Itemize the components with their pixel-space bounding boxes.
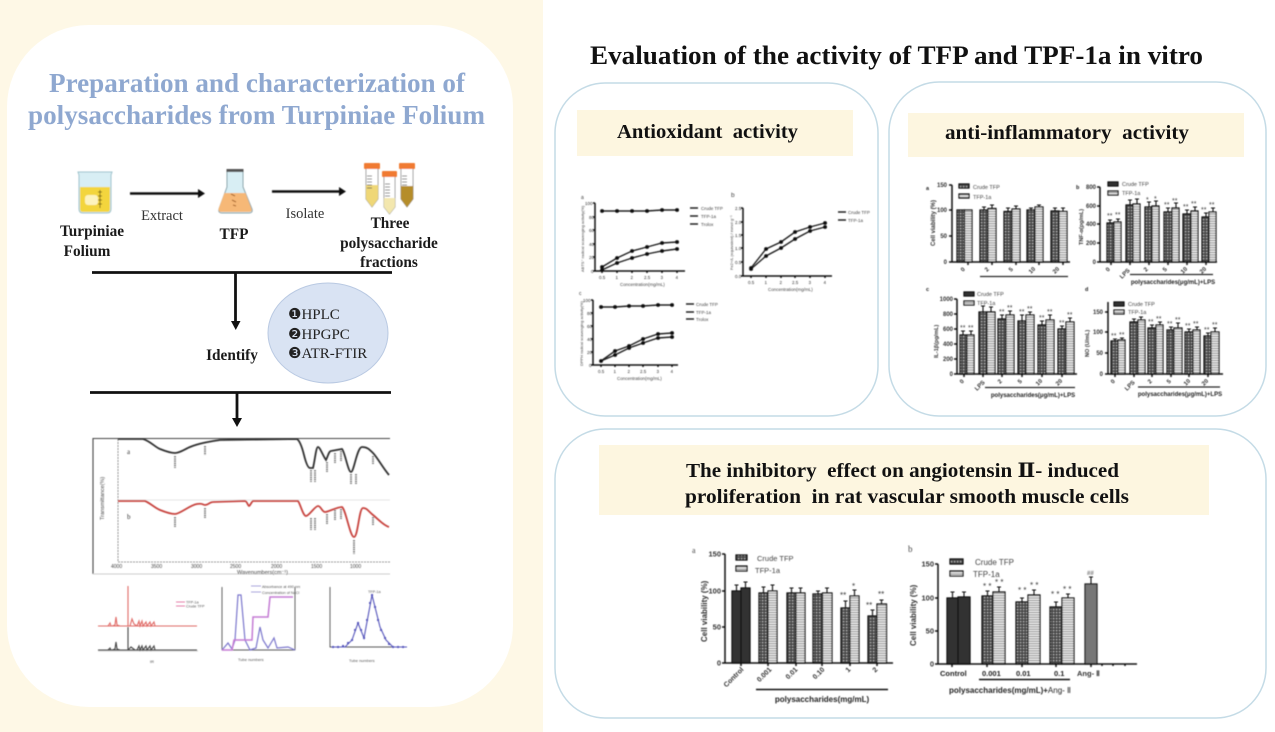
- chart: FTIR spectra: b: [127, 513, 131, 521]
- callout: methods ellipse: ❸ATR-FTIR: [288, 346, 367, 362]
- chart: ABTS radical scavenging: Concentration(mg/mL): [620, 282, 665, 287]
- chart: a VSMC cell viability: 0.001: [756, 666, 773, 684]
- chart: FRAP reducing power: 2.0: [735, 220, 742, 225]
- chart: DPPH radical scavenging: 20: [587, 350, 593, 355]
- panel: anti-inflammatory activity: [889, 82, 1266, 416]
- chart: ABTS radical scavenging: 0: [591, 269, 594, 274]
- chart: ABTS radical scavenging: TFP-1a: [701, 214, 717, 219]
- chart: ABTS radical scavenging: Trolox: [701, 222, 714, 227]
- chart: ABTS radical scavenging: 4: [676, 275, 678, 280]
- chart: c IL-1 beta: 5: [1017, 378, 1024, 385]
- chart: d NO: 5: [1166, 378, 1173, 385]
- chart: b VSMC cell viability with Ang II: b: [908, 544, 913, 554]
- chart: b TNF-alpha: 10: [1180, 266, 1190, 275]
- chart: c IL-1 beta: 10: [1035, 378, 1045, 387]
- chart: b VSMC cell viability with Ang II: 0.1: [1054, 669, 1064, 678]
- chart: b VSMC cell viability with Ang II: 100: [921, 594, 934, 602]
- chart: FRAP reducing power: Fe2+/L (equivalent) / mmol·g⁻¹: [729, 215, 734, 270]
- chart: b TNF-alpha: TFP-1a: [1122, 191, 1141, 197]
- chart: HPLC chromatograms: tR: [150, 659, 154, 664]
- chart: DPPH radical scavenging: 4: [670, 369, 674, 374]
- label: three polysaccharide fractions: polysaccharide: [340, 235, 438, 252]
- chart: FTIR spectra: 3000: [191, 564, 202, 570]
- chart: ABTS radical scavenging: 3: [660, 275, 664, 280]
- chart: b VSMC cell viability with Ang II: [908, 544, 1137, 695]
- title: evaluation of activity: Evaluation of the activity of TFP and TPF-1a in vitro: [590, 41, 1203, 70]
- chart: FRAP reducing power: TFP-1a: [848, 218, 864, 223]
- chart: c IL-1 beta: TFP-1a: [977, 301, 996, 307]
- chart: c IL-1 beta: 600: [943, 327, 954, 333]
- chart: b TNF-alpha: [1076, 182, 1217, 286]
- chart: b VSMC cell viability with Ang II: 0.01: [1016, 669, 1031, 678]
- chart: a VSMC cell viability: 1: [845, 666, 852, 674]
- chart: b VSMC cell viability with Ang II: * *: [1063, 585, 1071, 594]
- label: three polysaccharide fractions: [340, 215, 438, 271]
- chart: c IL-1 beta: 0: [959, 378, 966, 385]
- chart: b TNF-alpha: 800: [1086, 185, 1097, 191]
- chart: b VSMC cell viability with Ang II: 0.001: [982, 669, 1001, 678]
- callout: methods ellipse: ❷HPGPC: [288, 327, 350, 343]
- chart: ABTS radical scavenging: 60: [589, 228, 595, 233]
- title: preparation and characterization: [28, 68, 486, 130]
- chart: c IL-1 beta: **: [1039, 315, 1045, 322]
- chart: a VSMC cell viability: **: [866, 601, 872, 610]
- chart: b VSMC cell viability with Ang II: ##: [1087, 571, 1094, 577]
- heading: antioxidant activity: [577, 110, 853, 156]
- chart: DPPH radical scavenging: 1: [614, 369, 616, 374]
- chart: a VSMC cell viability: 2: [872, 666, 879, 674]
- chart: molecular weight peak: Tube numbers: [349, 658, 375, 663]
- chart: a VSMC cell viability: 0.10: [812, 666, 826, 681]
- chart: DPPH radical scavenging: 40: [587, 337, 593, 342]
- chart: b TNF-alpha: **: [1164, 202, 1170, 209]
- chart: b TNF-alpha: b: [1076, 185, 1080, 191]
- chart: a VSMC cell viability: Control: [723, 666, 745, 689]
- chart: a cell viability: Cell viability (%): [931, 200, 937, 246]
- chart: HPLC chromatograms: TFP-1a: [186, 600, 200, 604]
- chart: FRAP reducing power: 1.0: [735, 246, 742, 251]
- chart: FTIR spectra: 2500: [230, 564, 241, 570]
- chart: d NO: 20: [1201, 378, 1211, 387]
- chart: a VSMC cell viability: TFP-1a: [755, 566, 781, 575]
- chart: b VSMC cell viability with Ang II: Cell viability (%): [909, 584, 918, 646]
- chart: a VSMC cell viability: 50: [713, 622, 721, 632]
- chart: a VSMC cell viability: 0: [717, 658, 721, 668]
- chart: a cell viability: 20: [1052, 266, 1062, 275]
- chart: DPPH radical scavenging: Trolox: [696, 317, 709, 322]
- chart: DPPH radical scavenging: 3: [656, 369, 660, 374]
- chart: d NO: **: [1156, 316, 1162, 323]
- heading: anti-inflammatory activity: anti-inflammatory activity: [945, 122, 1189, 144]
- chart: FRAP reducing power: 0.5: [748, 280, 755, 285]
- chart: a cell viability: TFP-1a: [973, 195, 992, 201]
- chart: a VSMC cell viability: 0.01: [785, 666, 799, 681]
- chart: a VSMC cell viability: 100: [708, 586, 721, 596]
- chart: DPPH radical scavenging: 2.5: [640, 369, 647, 374]
- chart: b TNF-alpha: 2: [1143, 266, 1150, 273]
- arrow: extract: [130, 189, 205, 198]
- title: preparation and characterization: polysaccharides from Turpiniae Folium: [28, 100, 486, 130]
- chart: c IL-1 beta: [926, 287, 1077, 399]
- chart: d NO: **: [1148, 319, 1154, 326]
- chart: DPPH radical scavenging: c: [579, 291, 582, 297]
- chart: FTIR spectra: 4000: [111, 564, 122, 570]
- chart: b TNF-alpha: **: [1191, 201, 1197, 208]
- chart: b TNF-alpha: Crude TFP: [1122, 182, 1149, 188]
- chart: a VSMC cell viability: Cell viability (%): [700, 580, 709, 642]
- chart: c IL-1 beta: **: [1067, 312, 1073, 319]
- label: isolate: Isolate: [286, 206, 324, 222]
- label: extract: Extract: [141, 208, 183, 224]
- label: three polysaccharide fractions: fractions: [360, 254, 418, 271]
- chart: d NO: **: [1204, 327, 1210, 334]
- chart: ABTS radical scavenging: 2.5: [644, 275, 651, 280]
- chart: ABTS radical scavenging: a: [581, 195, 584, 201]
- chart: DPPH radical scavenging: 0.5: [598, 369, 605, 374]
- chart: FTIR spectra: 2000: [271, 564, 282, 570]
- chart: d NO: **: [1212, 322, 1218, 329]
- chart: FTIR spectra: a: [127, 448, 131, 456]
- label: identify: Identify: [206, 347, 258, 364]
- chart: a VSMC cell viability: 150: [708, 550, 721, 558]
- chart: c IL-1 beta: Crude TFP: [977, 292, 1004, 298]
- chart: b TNF-alpha: 0: [1105, 266, 1112, 273]
- chart: d NO: 100: [1093, 330, 1104, 336]
- chart: FRAP reducing power: 0.5: [735, 260, 742, 265]
- chart: b TNF-alpha: **: [1172, 198, 1178, 205]
- heading: inhibitory effect: The inhibitory effect on angiotensin Ⅱ- induced: [686, 460, 1119, 482]
- heading: inhibitory effect: proliferation in rat vascular smooth muscle cells: [685, 486, 1129, 508]
- chart: FRAP reducing power: 2.5: [792, 280, 799, 285]
- chart: a VSMC cell viability: a: [692, 546, 696, 555]
- chart: a cell viability: 2: [984, 266, 991, 273]
- chart: d NO: NO (U/mL): [1085, 330, 1091, 357]
- arrow: down to identify: [92, 272, 392, 330]
- chart: d NO: **: [1193, 321, 1199, 328]
- chart: b TNF-alpha: **: [1209, 202, 1215, 209]
- callout: methods ellipse: [268, 283, 388, 383]
- chart: FRAP reducing power: [729, 192, 870, 292]
- chart: ABTS radical scavenging: 100: [585, 201, 593, 206]
- chart: d NO: 0: [1100, 372, 1104, 378]
- chart: DPPH radical scavenging: Crude TFP: [696, 302, 718, 307]
- chart: b VSMC cell viability with Ang II: 150: [921, 560, 934, 568]
- chart: c IL-1 beta: **: [1007, 305, 1013, 312]
- chart: b TNF-alpha: 200: [1086, 241, 1097, 247]
- chart: b VSMC cell viability with Ang II: polysaccharides(mg/mL)+Ang- Ⅱ: [949, 686, 1071, 695]
- chart: molecular weight peak: [330, 587, 407, 663]
- chart: a cell viability: 0: [960, 266, 967, 273]
- chart: molecular weight peak: TFP-1a: [368, 590, 382, 594]
- chart: DPPH radical scavenging: TFP-1a: [696, 310, 712, 315]
- chart: d NO: Crude TFP: [1128, 302, 1155, 308]
- chart: b VSMC cell viability with Ang II: 50: [926, 626, 934, 636]
- chart: HPLC chromatograms: Crude TFP: [186, 604, 205, 608]
- chart: b TNF-alpha: 5: [1162, 266, 1169, 273]
- chart: d NO: 50: [1096, 351, 1104, 357]
- chart: d NO: polysaccharides(μg/mL)+LPS: [1138, 392, 1222, 398]
- chart: a cell viability: 100: [937, 208, 948, 214]
- chart: DPPH radical scavenging: 100: [583, 298, 591, 303]
- chart: b TNF-alpha: TNF-α(pg/mL): [1079, 209, 1085, 245]
- chart: c IL-1 beta: polysaccharides(μg/mL)+LPS: [991, 393, 1075, 399]
- chart: d NO: 0: [1110, 378, 1117, 385]
- chart: d NO: **: [1167, 321, 1173, 328]
- chart: FTIR spectra: 1000: [350, 564, 361, 570]
- chart: ABTS radical scavenging: 2: [630, 275, 634, 280]
- panel: preparation and characterization: [7, 25, 513, 707]
- chart: c IL-1 beta: LPS: [974, 380, 987, 392]
- chart: HPGPC elution profile: Absorbance at 490 nm: [262, 585, 300, 589]
- label: Turpiniae Folium: [60, 223, 124, 260]
- chart: ABTS radical scavenging: 80: [589, 215, 595, 220]
- callout: methods ellipse: ❶HPLC: [288, 307, 340, 323]
- chart: FRAP reducing power: Crude TFP: [848, 210, 870, 215]
- chart: c IL-1 beta: **: [999, 309, 1005, 316]
- label: three polysaccharide fractions: Three: [371, 215, 410, 232]
- chart: a cell viability: 50: [940, 234, 948, 240]
- chart: d NO: **: [1119, 332, 1125, 339]
- chart: d NO: 10: [1183, 378, 1193, 387]
- chart: b TNF-alpha: polysaccharides(μg/mL)+LPS: [1131, 280, 1215, 286]
- chart: a cell viability: [926, 183, 1070, 276]
- chart: ABTS radical scavenging: 20: [589, 255, 595, 260]
- heading: anti-inflammatory activity: [908, 113, 1244, 157]
- chart: FRAP reducing power: 0.0: [735, 274, 742, 279]
- chart: HPLC chromatograms: [98, 586, 205, 664]
- chart: a cell viability: 10: [1028, 266, 1038, 275]
- chart: b TNF-alpha: 400: [1086, 222, 1097, 228]
- chart: b VSMC cell viability with Ang II: Control: [940, 669, 967, 678]
- chart: b VSMC cell viability with Ang II: * *: [1018, 586, 1026, 595]
- chart: FRAP reducing power: Concentration(mg/mL): [768, 287, 813, 292]
- chart: a VSMC cell viability: **: [840, 591, 846, 600]
- chart: c IL-1 beta: c: [926, 287, 929, 293]
- icon: three tubes: [364, 163, 415, 214]
- chart: c IL-1 beta: **: [1059, 320, 1065, 327]
- chart: FRAP reducing power: 1.5: [735, 233, 742, 238]
- chart: b TNF-alpha: 0: [1093, 260, 1097, 266]
- chart: DPPH radical scavenging: DPPH radical scavenging activity(%): [579, 300, 584, 366]
- chart: d NO: **: [1185, 323, 1191, 330]
- arrow: isolate: [272, 187, 346, 196]
- chart: c IL-1 beta: **: [1027, 306, 1033, 313]
- icon: beaker: [78, 172, 112, 213]
- chart: c IL-1 beta: 2: [997, 378, 1004, 385]
- chart: DPPH radical scavenging: 2: [628, 369, 630, 374]
- chart: a VSMC cell viability: *: [852, 582, 855, 591]
- chart: b VSMC cell viability with Ang II: TFP-1a: [973, 570, 1000, 579]
- chart: b VSMC cell viability with Ang II: * *: [1051, 590, 1059, 599]
- chart: DPPH radical scavenging: 0: [589, 363, 592, 368]
- chart: HPGPC elution profile: Concentration of NaCl: [262, 591, 300, 595]
- chart: DPPH radical scavenging: 60: [587, 324, 593, 329]
- icon: flask: [218, 169, 252, 213]
- chart: b VSMC cell viability with Ang II: * *: [983, 582, 991, 591]
- title: preparation and characterization: Preparation and characterization of: [49, 68, 466, 98]
- chart: d NO: 150: [1093, 310, 1104, 316]
- chart: b TNF-alpha: *: [1146, 197, 1149, 204]
- chart: c IL-1 beta: IL-1β(pg/mL): [934, 325, 940, 358]
- chart: HPGPC elution profile: [222, 585, 300, 662]
- chart: c IL-1 beta: 20: [1055, 378, 1065, 387]
- panel: angiotensin II proliferation: [555, 429, 1266, 718]
- chart: d NO: **: [1175, 317, 1181, 324]
- heading: inhibitory effect: [599, 445, 1209, 515]
- chart: b TNF-alpha: LPS: [1119, 268, 1132, 280]
- chart: ABTS radical scavenging: 0.5: [599, 275, 606, 280]
- chart: b TNF-alpha: 600: [1086, 204, 1097, 210]
- label: TFP: TFP: [220, 226, 248, 243]
- chart: b TNF-alpha: 20: [1199, 266, 1209, 275]
- chart: c IL-1 beta: 0: [950, 372, 954, 378]
- chart: d NO: d: [1085, 287, 1088, 293]
- chart: d NO: LPS: [1124, 380, 1137, 392]
- chart: b TNF-alpha: *: [1154, 196, 1157, 203]
- chart: d NO: [1085, 287, 1223, 398]
- chart: FRAP reducing power: 2.5: [735, 206, 742, 211]
- chart: b TNF-alpha: **: [1107, 213, 1113, 220]
- label: Turpiniae Folium: Folium: [64, 243, 111, 260]
- chart: HPGPC elution profile: Tube numbers: [238, 657, 264, 662]
- chart: c IL-1 beta: **: [960, 325, 966, 332]
- chart: d NO: TFP-1a: [1128, 310, 1147, 316]
- chart: FTIR spectra: Wavenumbers(cm⁻¹): [237, 570, 288, 576]
- chart: FRAP reducing power: 1: [764, 280, 768, 285]
- chart: c IL-1 beta: 800: [943, 312, 954, 318]
- chart: b VSMC cell viability with Ang II: 0: [930, 660, 934, 668]
- chart: c IL-1 beta: 400: [943, 342, 954, 348]
- chart: b VSMC cell viability with Ang II: * *: [995, 578, 1003, 587]
- chart: FRAP reducing power: b: [731, 192, 735, 199]
- chart: ABTS radical scavenging: 40: [589, 242, 595, 247]
- chart: c IL-1 beta: **: [968, 325, 974, 332]
- chart: a cell viability: 0: [944, 260, 948, 266]
- panel: antioxidant activity: [555, 83, 878, 416]
- chart: b TNF-alpha: **: [1115, 212, 1121, 219]
- chart: b TNF-alpha: **: [1201, 207, 1207, 214]
- chart: FRAP reducing power: 3: [808, 280, 812, 285]
- chart: ABTS radical scavenging: Crude TFP: [701, 206, 723, 211]
- chart: ABTS radical scavenging: [580, 195, 723, 287]
- chart: b VSMC cell viability with Ang II: Crude TFP: [975, 558, 1014, 567]
- chart: a cell viability: 5: [1008, 266, 1015, 273]
- background: cream left half: [0, 0, 543, 732]
- chart: FTIR spectra: Transmittance(%): [100, 477, 106, 520]
- chart: a cell viability: Crude TFP: [973, 185, 1000, 191]
- label: Turpiniae Folium: Turpiniae: [60, 223, 124, 240]
- chart: b VSMC cell viability with Ang II: Ang- Ⅱ: [1077, 669, 1100, 678]
- chart: c IL-1 beta: **: [1019, 309, 1025, 316]
- chart: FRAP reducing power: 2: [780, 280, 782, 285]
- chart: ABTS radical scavenging: 1: [616, 275, 618, 280]
- chart: FTIR spectra: [93, 438, 390, 576]
- chart: DPPH radical scavenging: Concentration(mg/mL): [617, 376, 662, 381]
- chart: a cell viability: 150: [937, 183, 948, 189]
- chart: a VSMC cell viability: [692, 546, 893, 704]
- chart: d NO: **: [1111, 333, 1117, 340]
- chart: c IL-1 beta: 200: [943, 357, 954, 363]
- chart: a VSMC cell viability: polysaccharides(mg/mL): [775, 695, 869, 704]
- chart: a VSMC cell viability: Crude TFP: [757, 554, 794, 563]
- chart: FTIR spectra: 3500: [151, 564, 162, 570]
- chart: c IL-1 beta: 1000: [940, 297, 954, 303]
- chart: a VSMC cell viability: **: [878, 590, 884, 599]
- chart: FRAP reducing power: 4: [824, 280, 826, 285]
- chart: d NO: 2: [1147, 378, 1154, 385]
- chart: a cell viability: a: [926, 186, 930, 192]
- chart: DPPH radical scavenging: [579, 291, 718, 381]
- arrow: down to spectra: [90, 392, 391, 427]
- chart: DPPH radical scavenging: 80: [587, 311, 593, 316]
- chart: b VSMC cell viability with Ang II: * *: [1030, 581, 1038, 590]
- chart: c IL-1 beta: **: [1047, 309, 1053, 316]
- chart: ABTS radical scavenging: ABTS⁺ radical scavenging activity(%): [580, 205, 585, 272]
- chart: b TNF-alpha: **: [1183, 204, 1189, 211]
- chart: FTIR spectra: 1500: [311, 564, 322, 570]
- heading: antioxidant activity: Antioxidant activity: [617, 121, 798, 143]
